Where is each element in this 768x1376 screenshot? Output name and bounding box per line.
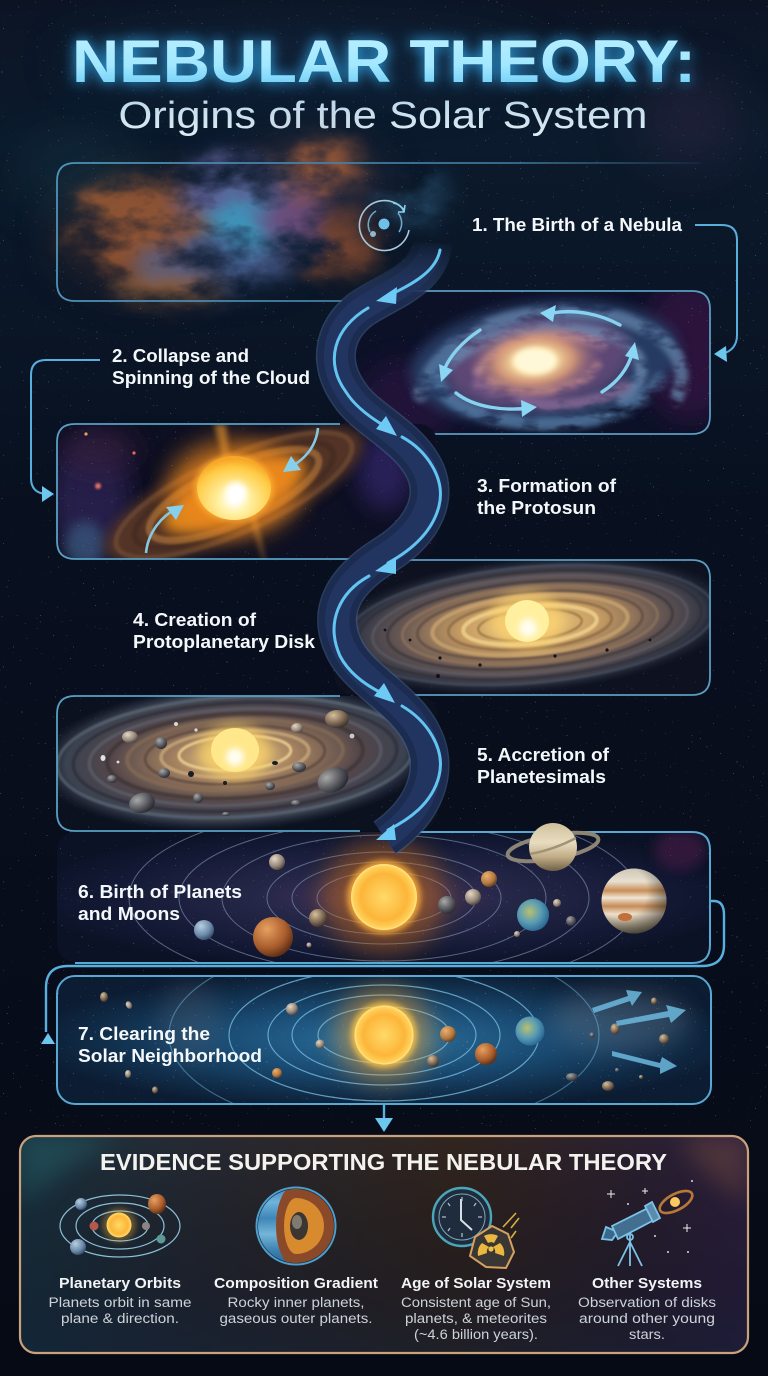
panel 5: planetesimals bbox=[56, 695, 411, 832]
description: other systems: Observation of disks bbox=[578, 1295, 716, 1310]
icon: swirling cloud bbox=[359, 201, 409, 251]
arrow: panel 7 to evidence bbox=[375, 1105, 393, 1132]
step 4 label: Protoplanetary Disk bbox=[133, 632, 316, 652]
description: age of solar system: Consistent age of Sun, bbox=[401, 1295, 551, 1310]
step 3 label: the Protosun bbox=[477, 498, 596, 518]
panel: evidence bbox=[20, 1136, 748, 1353]
step 7 label bbox=[78, 1024, 262, 1066]
accretion disk bbox=[98, 424, 368, 558]
description: age of solar system: (~4.6 billion years). bbox=[414, 1327, 538, 1342]
outward arrows bbox=[592, 990, 686, 1074]
panel 4: protoplanetary disk bbox=[356, 559, 711, 696]
planet: Saturn bbox=[506, 823, 600, 871]
title: NEBULAR THEORY: bbox=[72, 28, 696, 95]
panel 3: protosun bbox=[56, 423, 437, 560]
step 5 label bbox=[477, 745, 610, 787]
rocks bbox=[100, 710, 354, 816]
arrow: step 1 to panel 2 bbox=[695, 225, 737, 362]
step 6 label: and Moons bbox=[78, 904, 180, 924]
arrow: step 2 to panel 3 bbox=[31, 360, 100, 502]
step 7 label: 7. Clearing the bbox=[78, 1024, 210, 1044]
rotation arrows bbox=[439, 305, 639, 417]
flow arrows along the ribbon bbox=[334, 250, 440, 840]
column: other systems bbox=[578, 1180, 716, 1342]
description: planetary orbits: plane & direction. bbox=[61, 1311, 179, 1326]
column: composition gradient bbox=[214, 1186, 378, 1326]
step 7 label: Solar Neighborhood bbox=[78, 1046, 262, 1066]
icon: orbits bbox=[60, 1194, 180, 1257]
description: age of solar system: planets, & meteorites bbox=[405, 1311, 547, 1326]
column: age of solar system bbox=[401, 1188, 551, 1342]
subtitle: Origins of the Solar System bbox=[118, 95, 648, 137]
description: other systems: stars. bbox=[629, 1327, 665, 1342]
column: planetary orbits bbox=[48, 1194, 192, 1326]
description: planetary orbits: Planets orbit in same bbox=[48, 1295, 192, 1310]
description: other systems: around other young bbox=[579, 1311, 715, 1326]
description: planetary orbits bbox=[48, 1295, 192, 1326]
icon: clock and radioactive rock bbox=[433, 1188, 519, 1268]
description: age of solar system bbox=[401, 1295, 551, 1342]
step 1 label: 1. The Birth of a Nebula bbox=[472, 215, 683, 235]
heading: age of solar system: Age of Solar System bbox=[401, 1275, 551, 1292]
heading: planetary orbits: Planetary Orbits bbox=[59, 1275, 181, 1292]
panel 7 border bbox=[57, 976, 711, 1104]
icon: telescope and distant disk bbox=[602, 1180, 696, 1266]
step 3 label: 3. Formation of bbox=[477, 476, 617, 496]
step 2 label bbox=[112, 346, 310, 388]
step 6 label: 6. Birth of Planets bbox=[78, 882, 242, 902]
galaxy base glow bbox=[406, 294, 684, 428]
heading: composition gradient: Composition Gradient bbox=[214, 1275, 378, 1292]
nebula soft glow bbox=[60, 145, 380, 285]
description: composition gradient: Rocky inner planets, bbox=[228, 1295, 364, 1310]
description: composition gradient bbox=[220, 1295, 372, 1326]
planets bbox=[194, 854, 666, 957]
disk rings bbox=[356, 561, 710, 692]
title: NEBULAR THEORY: bbox=[72, 28, 696, 95]
orbit rings bbox=[168, 977, 600, 1103]
accretion rings bbox=[58, 696, 411, 828]
panel 7: clearing the neighborhood bbox=[56, 975, 712, 1105]
step 5 label: 5. Accretion of bbox=[477, 745, 610, 765]
panel 5 border bbox=[57, 696, 360, 831]
description: other systems bbox=[578, 1295, 716, 1342]
step 4 label: 4. Creation of bbox=[133, 610, 257, 630]
step 4 label bbox=[133, 610, 316, 652]
heading: other systems: Other Systems bbox=[592, 1275, 702, 1292]
panel 3 border bbox=[57, 424, 365, 559]
panel 4 border bbox=[385, 560, 710, 695]
evidence heading: EVIDENCE SUPPORTING THE NEBULAR THEORY bbox=[100, 1149, 667, 1175]
step 3 label bbox=[477, 476, 617, 518]
winding ribbon connecting the panels bbox=[334, 243, 440, 840]
nebula cloud bbox=[70, 142, 451, 301]
panel 1: nebula bbox=[57, 142, 700, 301]
galaxy spiral arms bbox=[420, 312, 681, 424]
panel 6 border bbox=[75, 832, 710, 963]
step 6 label bbox=[78, 882, 242, 924]
step 2 label: 2. Collapse and bbox=[112, 346, 249, 366]
panel 2 border bbox=[400, 291, 710, 434]
step 5 label: Planetesimals bbox=[477, 767, 606, 787]
orbit rings bbox=[128, 832, 628, 962]
description: composition gradient: gaseous outer planets. bbox=[220, 1311, 372, 1326]
panel 1 border bbox=[57, 163, 700, 301]
step 2 label: Spinning of the Cloud bbox=[112, 368, 310, 388]
arrow: panel 6 to panel 7 bbox=[41, 901, 724, 1044]
planets and debris bbox=[100, 992, 669, 1094]
panel 6: planets and moons bbox=[57, 823, 711, 964]
panel 2: spinning cloud bbox=[342, 290, 711, 435]
icon: planet cross-section bbox=[256, 1186, 336, 1266]
infall arrows bbox=[146, 428, 318, 553]
